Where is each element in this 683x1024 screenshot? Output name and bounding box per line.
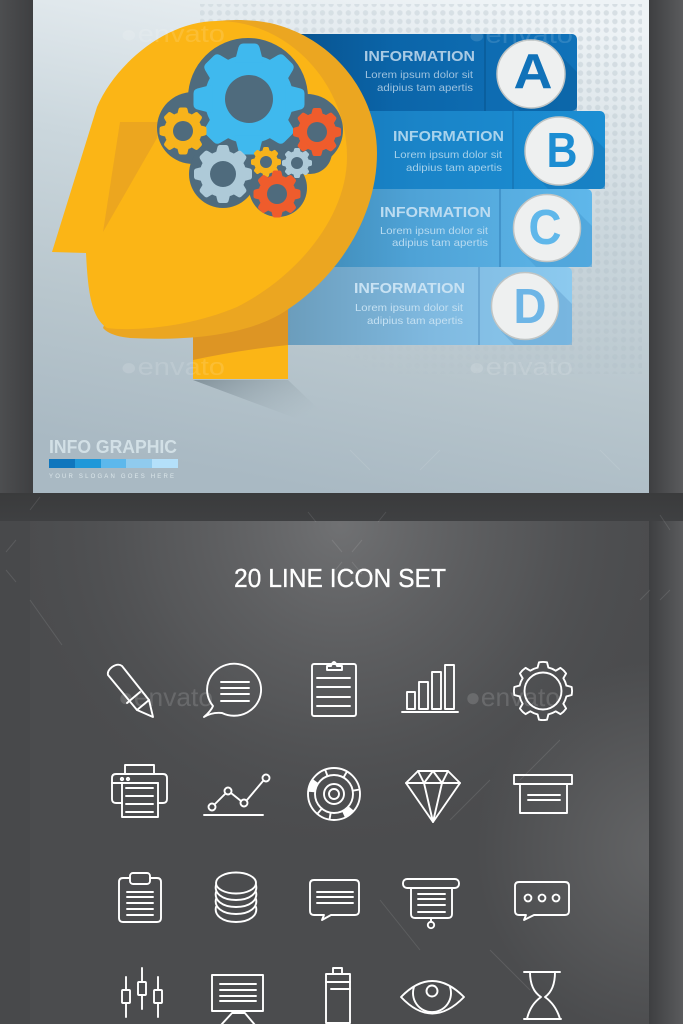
watermarks: ●envato (468, 354, 573, 381)
icon: speech bubble (204, 664, 261, 717)
banner C badge: C (528, 201, 562, 255)
banner B text: Lorem ipsum dolor sit (394, 149, 502, 161)
icon: line chart (204, 774, 270, 815)
watermarks: ●envato (118, 682, 213, 712)
banner C text: INFORMATION (380, 204, 491, 221)
gear: red right (293, 108, 341, 156)
icon: sliders (122, 968, 162, 1017)
banner D (288, 267, 572, 345)
watermarks: ●envato (465, 682, 560, 712)
panel background (33, 0, 649, 493)
panel background (30, 521, 649, 1024)
brand colour strip (49, 459, 178, 468)
banner D badge (492, 272, 558, 340)
forehead fold (103, 122, 158, 232)
brain cloud (157, 38, 343, 217)
brand block (49, 437, 178, 480)
icon: bar chart (402, 665, 458, 712)
head face (52, 21, 347, 329)
banner D text: Lorem ipsum dolor sit (355, 302, 463, 314)
banner A badge: A (514, 45, 552, 99)
banner B text: adipius tam apertis (406, 162, 502, 174)
panel: infographic (33, 0, 649, 493)
banner C text: Lorem ipsum dolor sit (380, 225, 488, 237)
banner C text: adipius tam apertis (392, 237, 488, 249)
icon: clipboard (312, 662, 356, 716)
neck (193, 300, 288, 379)
banner B (296, 111, 605, 189)
banner B text: INFORMATION (393, 128, 504, 145)
banner B badge (525, 117, 593, 185)
faint diagonal scratches (6, 450, 670, 990)
gear: yellow left (160, 108, 206, 154)
icon: note clipboard (119, 873, 161, 922)
icon: archive box (514, 775, 572, 813)
banner C badge (514, 194, 580, 262)
banner A text: INFORMATION (364, 48, 475, 65)
gear: red bottom (254, 170, 300, 218)
gear: small grey (282, 148, 312, 178)
watermarks (120, 21, 573, 381)
icon: hourglass (524, 972, 561, 1019)
banner A text (364, 48, 475, 94)
watermarks: ●envato (120, 21, 225, 48)
icon: eye (401, 981, 464, 1014)
icon: pencil (108, 665, 153, 717)
gear: grey (194, 145, 252, 203)
icon: presentation board (212, 975, 263, 1024)
banner A text: adipius tam apertis (377, 82, 473, 94)
banner D text: INFORMATION (354, 280, 465, 297)
banner C text (380, 204, 491, 249)
icon: database (216, 872, 256, 922)
gear: small yellow (251, 147, 281, 177)
icon: printer (112, 765, 167, 817)
banner D text (354, 280, 465, 327)
icon: chat lines (310, 880, 359, 920)
watermarks (118, 682, 560, 712)
watermarks: ●envato (468, 22, 573, 49)
panel: icon set (30, 521, 649, 1024)
brand slogan: YOUR SLOGAN GOES HERE (49, 474, 174, 480)
banner C (290, 189, 592, 267)
dotted world map texture (200, 4, 642, 278)
brand title: INFO GRAPHIC (49, 437, 177, 457)
neck shade (193, 300, 288, 360)
icon grid (108, 661, 573, 1024)
icon: disc (308, 768, 360, 820)
head back shade (103, 20, 377, 339)
icon: battery (326, 968, 350, 1023)
icon set heading: 20 LINE ICON SET (234, 563, 446, 593)
banner B badge: B (546, 124, 578, 178)
neck shadow (193, 380, 330, 420)
banner A text: Lorem ipsum dolor sit (365, 69, 473, 81)
gear: large blue (194, 44, 304, 154)
banner A (296, 34, 577, 111)
watermarks: ●envato (120, 354, 225, 381)
banner D text: adipius tam apertis (367, 315, 463, 327)
banner A badge (497, 40, 565, 108)
icon: projector screen (403, 879, 459, 928)
icon: gear (513, 661, 573, 721)
head illustration (52, 20, 377, 379)
icon: diamond (406, 771, 460, 822)
banner D badge: D (514, 280, 546, 334)
icon: chat dots (515, 882, 569, 920)
banner B text (393, 128, 504, 174)
